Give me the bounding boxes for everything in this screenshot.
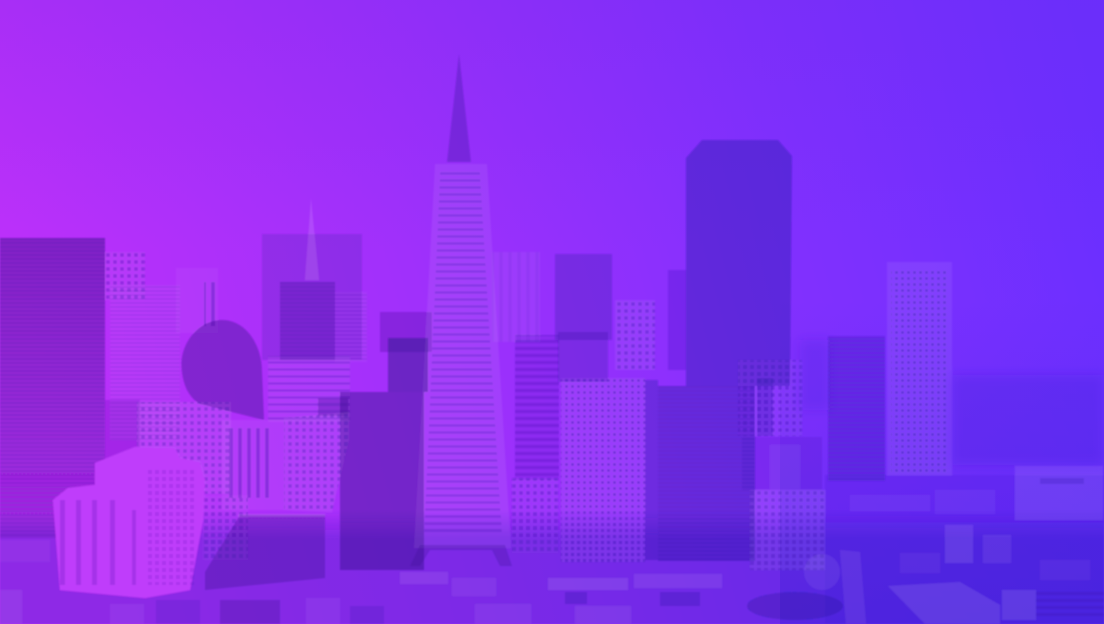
distant right city haze (800, 340, 1104, 465)
lower city dark base (0, 475, 1104, 624)
large pale building (53, 447, 205, 598)
foreground rooftops (0, 540, 843, 624)
secondary pyramid tower (262, 198, 367, 362)
background towers behind pyramid (492, 252, 655, 553)
mid block building (268, 356, 350, 422)
right low buildings (804, 466, 1104, 624)
dark low rotunda (205, 514, 325, 590)
left dark tower (0, 238, 140, 538)
dark tree mass (181, 320, 264, 420)
right towers (828, 262, 952, 481)
dark towers by pyramid (318, 312, 432, 570)
transamerica pyramid (410, 54, 512, 566)
left mid towers (105, 252, 218, 440)
dark glass tower (668, 140, 802, 436)
central city blocks (561, 378, 825, 570)
lower left office blocks (137, 402, 349, 560)
